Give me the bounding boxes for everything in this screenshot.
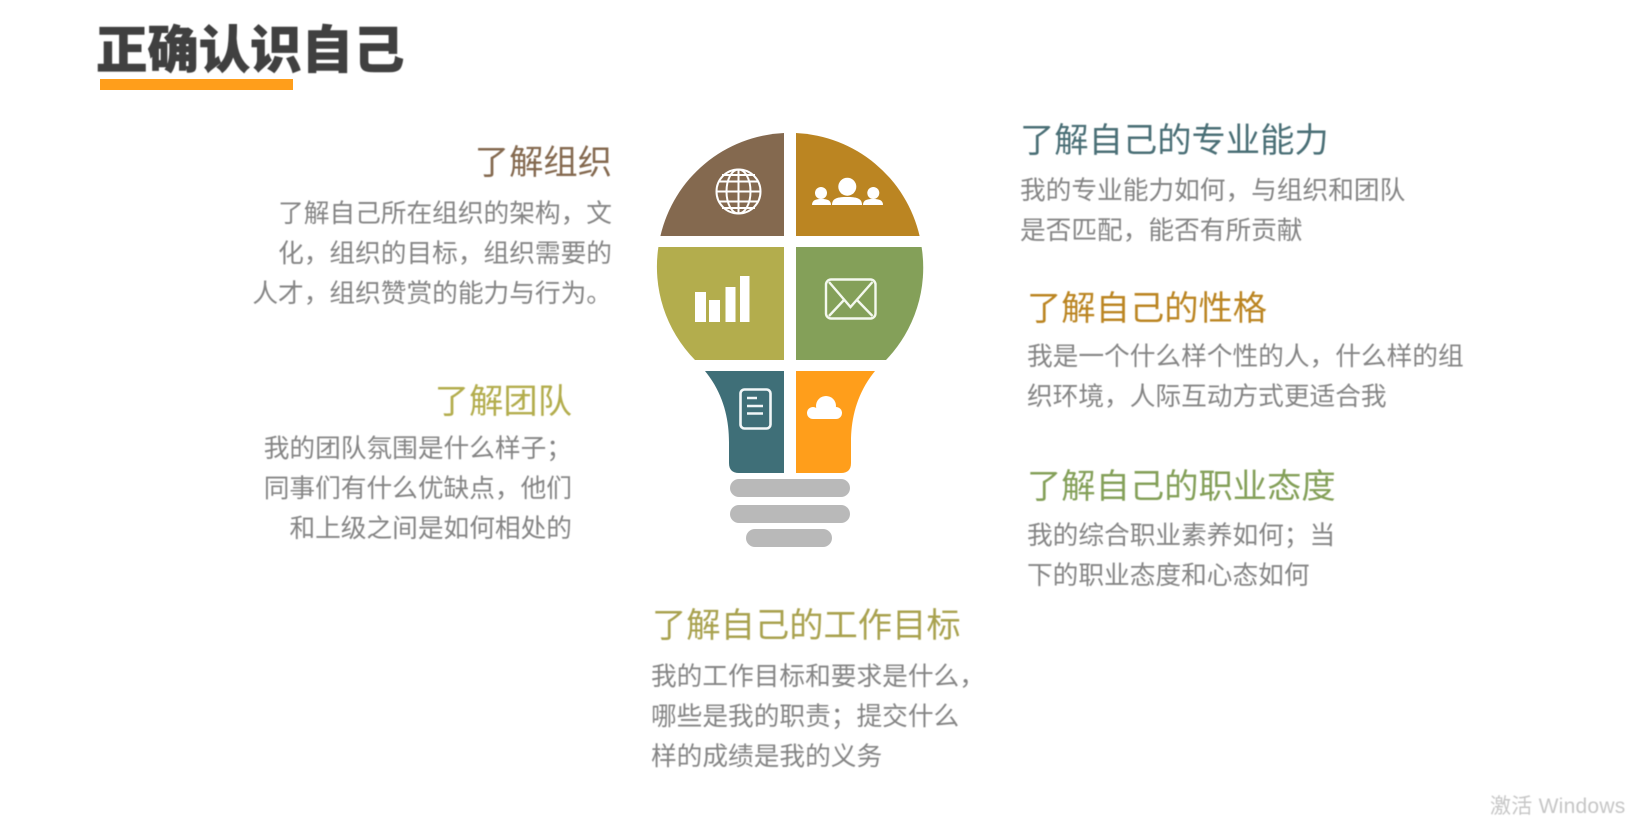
- icon: document: [740, 390, 770, 428]
- text: professional attitude: 我的综合职业素养如何；当: [1027, 522, 1335, 550]
- icon: people: [812, 178, 883, 205]
- segment: gold top right with people: [796, 133, 920, 236]
- text: professional ability: 我的专业能力如何，与组织和团队: [1020, 177, 1405, 205]
- text: work goals: 哪些是我的职责；提交什么: [651, 703, 959, 731]
- icon: globe: [716, 170, 760, 214]
- text: work goals: [651, 662, 985, 771]
- text: understand the organisation: [252, 200, 612, 308]
- segment: green middle right with envelope: [796, 247, 923, 360]
- heading: understand the organisation: 了解组织: [475, 144, 612, 182]
- heading: understand the team: 了解团队: [435, 383, 572, 421]
- text: understand the organisation: 人才，组织赞赏的能力与行为。: [252, 280, 612, 308]
- text: understand the team: [264, 434, 572, 543]
- text: professional ability: 是否匹配，能否有所贡献: [1020, 217, 1303, 245]
- text: professional attitude: 下的职业态度和心态如何: [1027, 562, 1310, 590]
- title underline: [100, 79, 293, 90]
- title: 正确认识自己: [96, 21, 404, 79]
- text: understand the team: 我的团队氛围是什么样子；: [264, 435, 572, 463]
- bulb base: screw threads: [730, 479, 850, 547]
- text: personality: [1027, 342, 1464, 410]
- icon: bar chart: [695, 276, 750, 322]
- icon: cloud: [807, 396, 842, 419]
- heading: professional ability: 了解自己的专业能力: [1020, 122, 1329, 160]
- segment: orange lower right with cloud: [796, 371, 875, 473]
- text: work goals: 我的工作目标和要求是什么，: [651, 663, 985, 691]
- segment: olive middle left with bar chart: [657, 247, 784, 360]
- text: work goals: 样的成绩是我的义务: [651, 743, 882, 771]
- text: understand the team: 和上级之间是如何相处的: [289, 515, 572, 543]
- heading: professional attitude: 了解自己的职业态度: [1027, 468, 1336, 506]
- segment: teal lower left with document: [705, 371, 784, 473]
- heading: work goals: 了解自己的工作目标: [652, 607, 961, 645]
- text: understand the organisation: 了解自己所在组织的架构，文: [278, 200, 612, 228]
- segment: brown top left with globe: [660, 133, 784, 236]
- icon: envelope: [826, 280, 876, 318]
- text: understand the team: 同事们有什么优缺点，他们: [264, 475, 572, 503]
- text: professional ability: [1020, 176, 1405, 245]
- heading: personality: 了解自己的性格: [1027, 290, 1267, 328]
- watermark: 激活 Windows: [1490, 795, 1626, 818]
- text: professional attitude: [1027, 522, 1335, 590]
- text: understand the organisation: 化，组织的目标，组织需要的: [278, 240, 612, 268]
- text: personality: 织环境，人际互动方式更适合我: [1027, 382, 1387, 410]
- text: personality: 我是一个什么样个性的人，什么样的组: [1027, 342, 1464, 370]
